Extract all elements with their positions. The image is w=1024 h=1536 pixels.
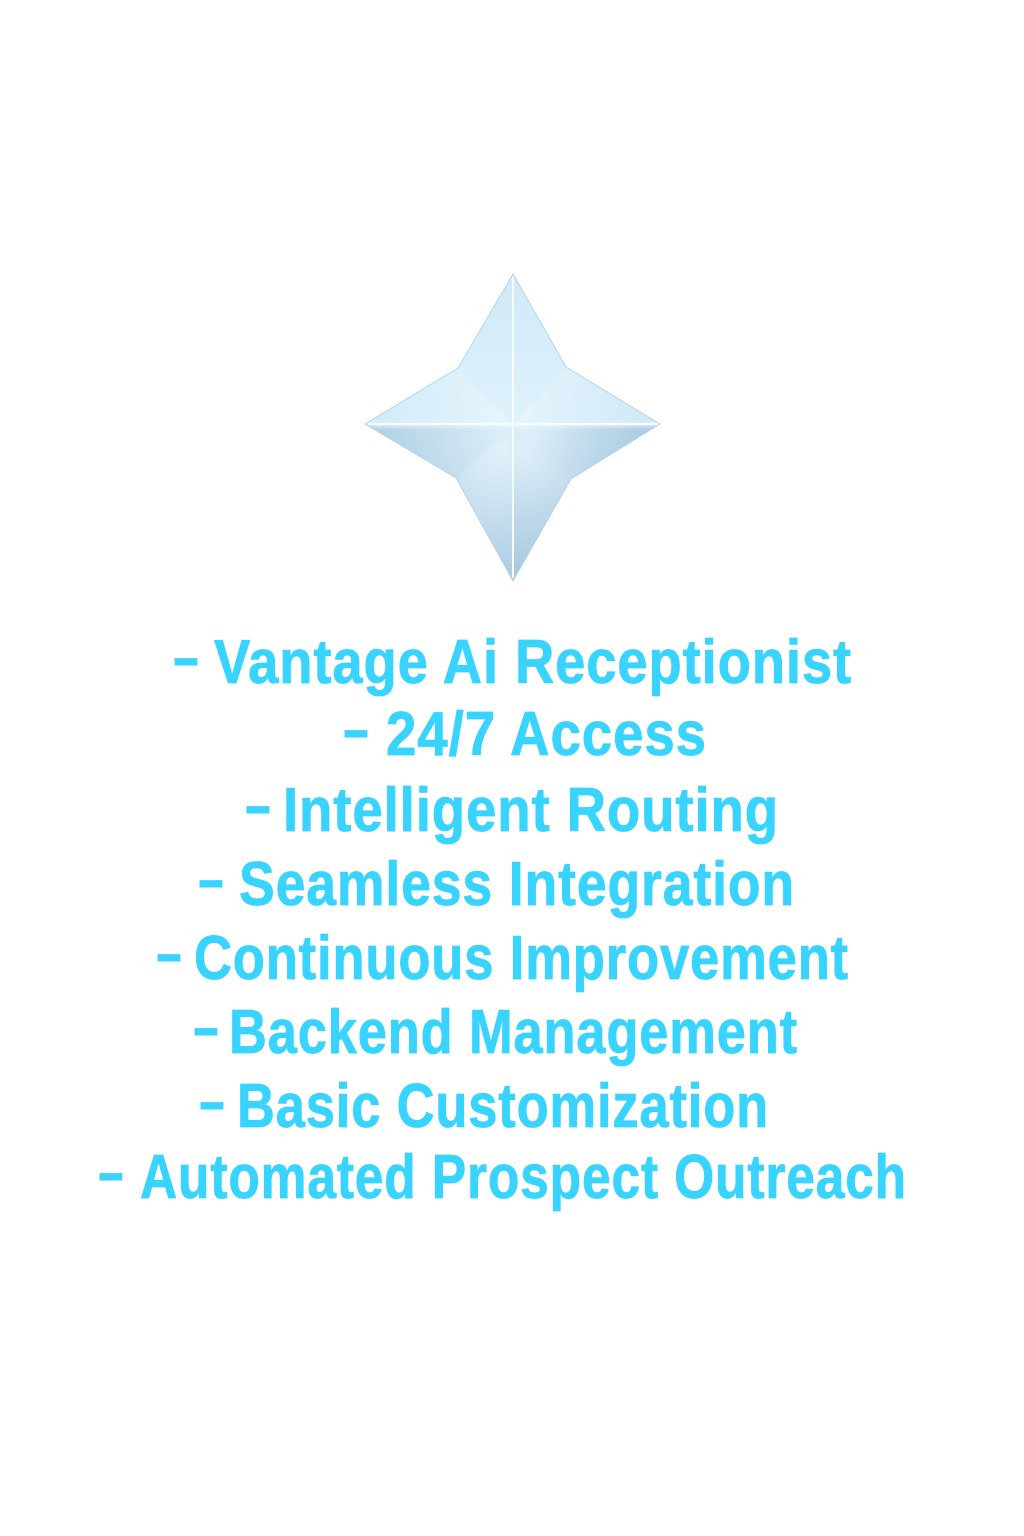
list item: Continuous Improvement: -: [154, 919, 184, 988]
list item: Vantage Ai Receptionist: Vantage Ai Receptionist: [214, 628, 852, 697]
list item: Automated Prospect Outreach: -: [96, 1138, 126, 1207]
list item: Intelligent Routing: Intelligent Routing: [283, 776, 779, 845]
star horizontal highlight: [368, 423, 658, 425]
list item: Intelligent Routing: -: [243, 771, 273, 840]
star vertical highlight: [512, 277, 514, 578]
list item: Seamless Integration: Seamless Integration: [239, 850, 795, 919]
list item: 24/7 Access: -: [341, 695, 371, 764]
feature list: [96, 623, 907, 1212]
icon: four-pointed crystal star: [364, 273, 661, 582]
list item: Basic Customization: Basic Customization: [237, 1072, 769, 1141]
list item: Backend Management: -: [191, 993, 221, 1062]
star soft facets: [366, 275, 659, 580]
star outline: [365, 274, 660, 581]
list item: Vantage Ai Receptionist: -: [171, 623, 201, 692]
list item: Basic Customization: -: [197, 1067, 227, 1136]
star body clip: [366, 275, 659, 580]
list item: Seamless Integration: -: [196, 845, 226, 914]
list item: Backend Management: Backend Management: [229, 998, 798, 1067]
list item: Continuous Improvement: Continuous Improvement: [194, 924, 849, 993]
list item: 24/7 Access: 24/7 Access: [386, 700, 707, 769]
